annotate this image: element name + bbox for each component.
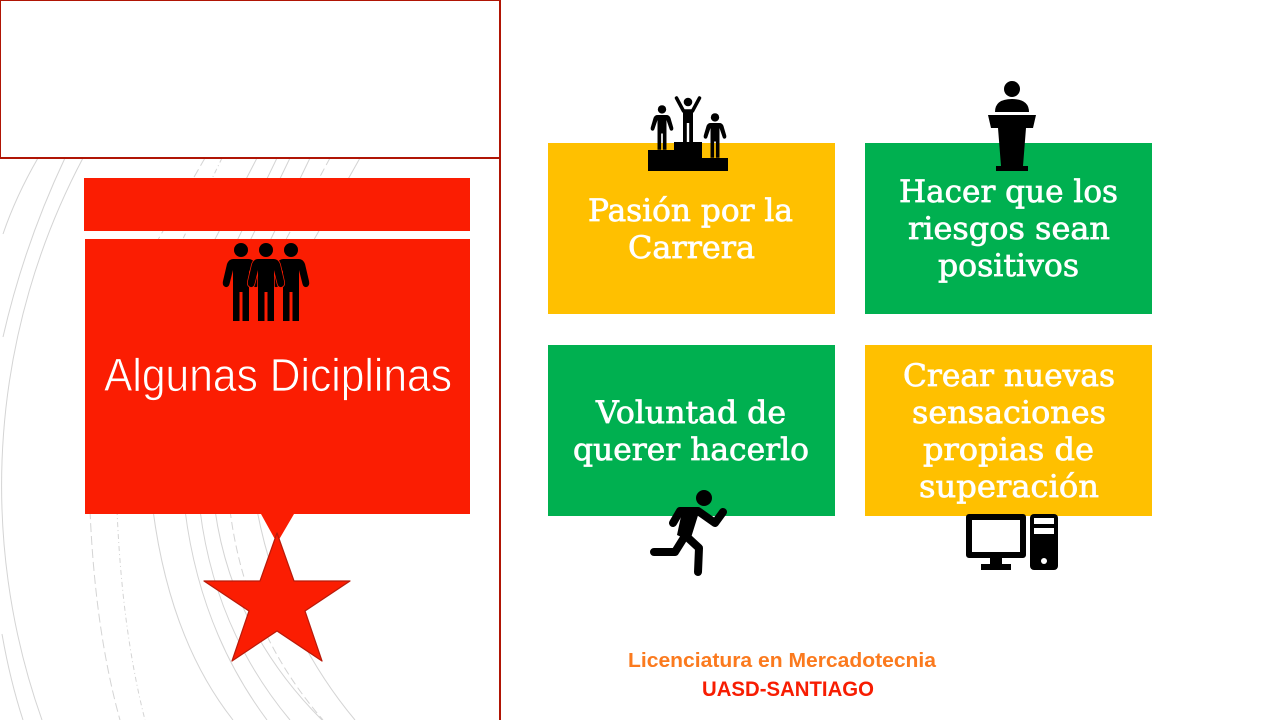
card: Hacer que los riesgos sean positivos (865, 143, 1152, 314)
card: Crear nuevas sensaciones propias de superación: propias de (923, 432, 1094, 468)
card: Hacer que los riesgos sean positivos: riesgos sean (908, 211, 1110, 247)
card: Voluntad de querer hacerlo: Voluntad de (595, 395, 786, 431)
red callout panel (85, 239, 470, 543)
card: Voluntad de querer hacerlo (548, 345, 835, 516)
icon: running person (654, 490, 723, 572)
card: Pasión por la Carrera (548, 143, 835, 314)
title: Algunas Diciplinas (104, 349, 452, 401)
card: Voluntad de querer hacerlo: querer hacerlo (573, 432, 809, 468)
card: Crear nuevas sensaciones propias de superación (865, 345, 1152, 516)
top outlined box (0, 0, 500, 158)
icon: group of people (223, 243, 309, 321)
footer: degree name: Licenciatura en Mercadotecnia (628, 650, 937, 672)
card: Pasión por la Carrera: Pasión por la (588, 193, 793, 229)
icon: winners podium (648, 98, 728, 171)
card: Hacer que los riesgos sean positivos: positivos (938, 248, 1079, 284)
card: Hacer que los riesgos sean positivos: Hacer que los (899, 174, 1118, 210)
icon: desktop computer (966, 514, 1058, 570)
card: Pasión por la Carrera: Carrera (628, 230, 755, 266)
footer: university: UASD-SANTIAGO (702, 678, 874, 701)
card: Crear nuevas sensaciones propias de superación: superación (919, 469, 1099, 505)
red header bar (84, 178, 470, 231)
vertical divider (499, 0, 501, 720)
icon: star (204, 533, 350, 661)
card: Crear nuevas sensaciones propias de superación: Crear nuevas (903, 358, 1115, 394)
icon: speaker at lectern (988, 81, 1036, 171)
card: Crear nuevas sensaciones propias de superación: sensaciones (912, 395, 1106, 431)
